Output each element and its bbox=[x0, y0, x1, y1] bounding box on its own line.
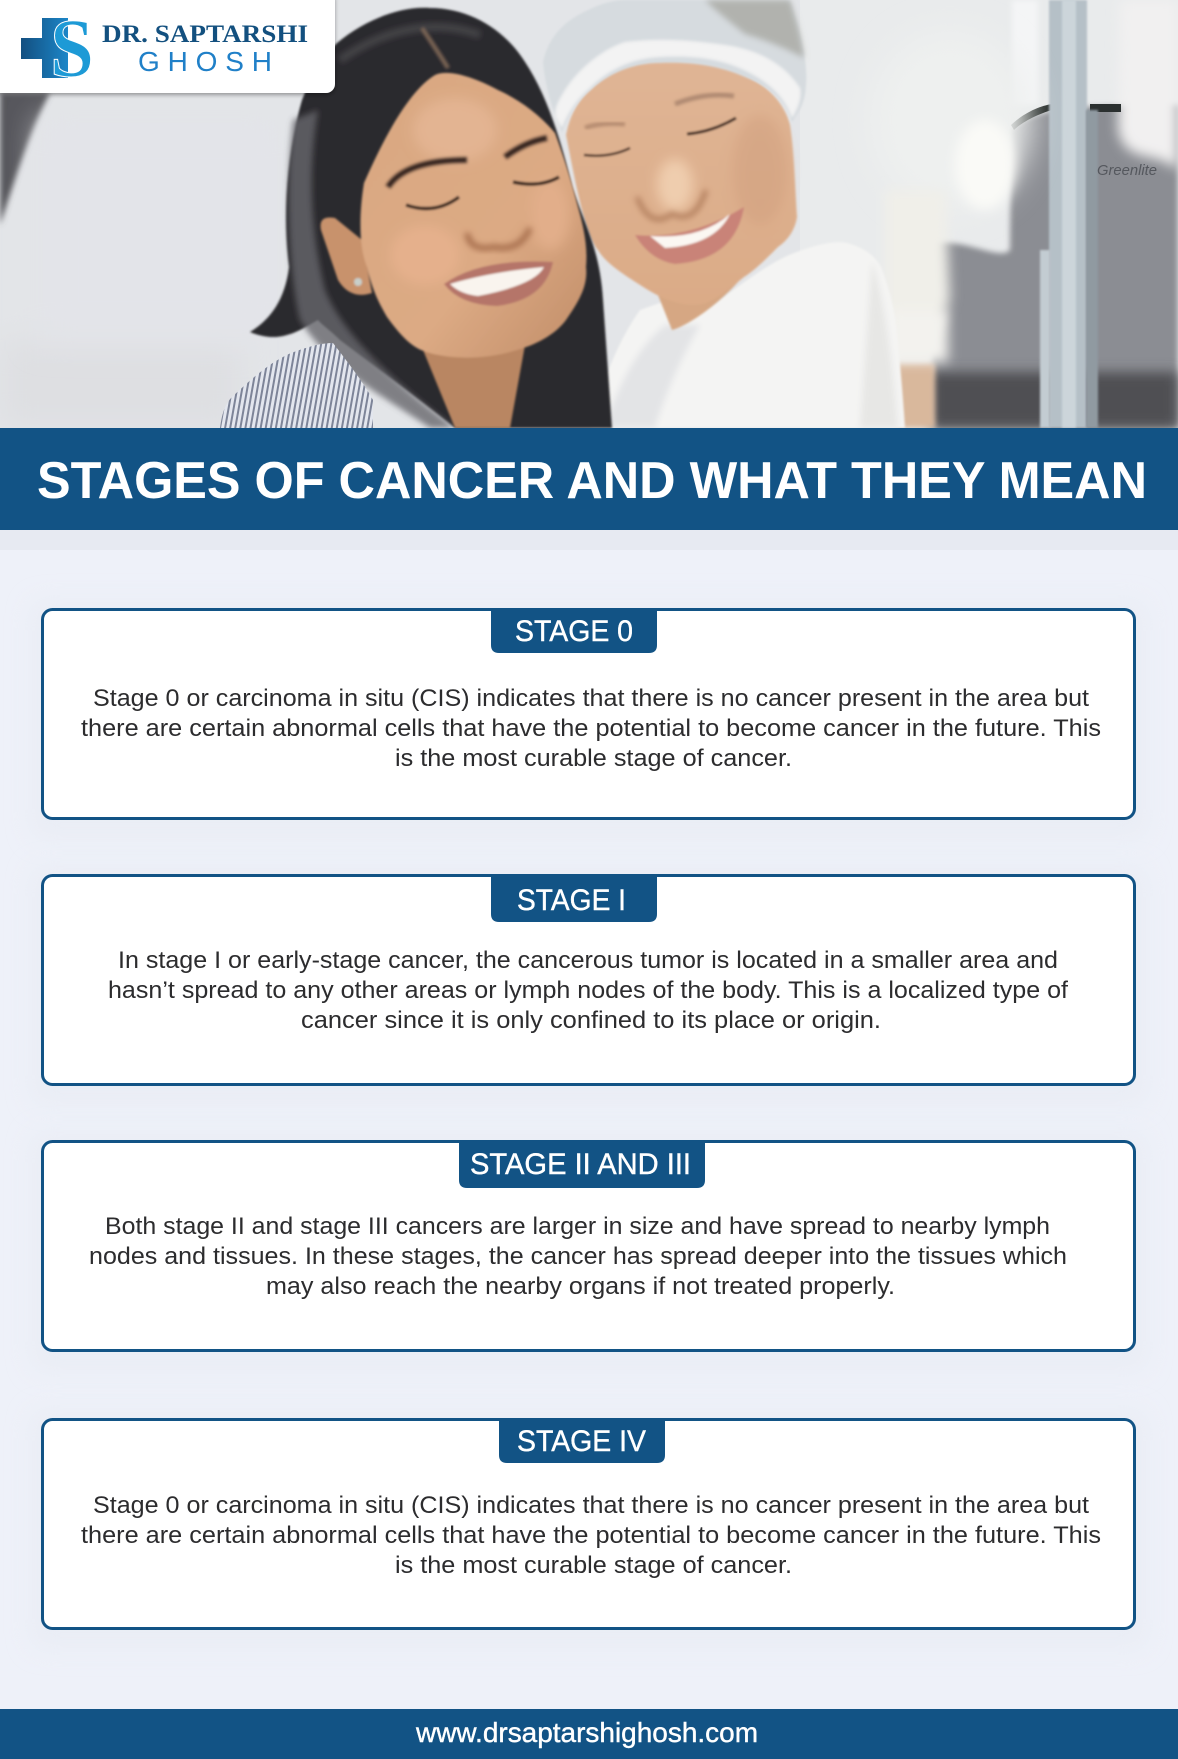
woman 2: headscarf bbox=[543, 0, 806, 132]
stage I badge bbox=[491, 874, 657, 922]
stage IV description bbox=[81, 1492, 1101, 1579]
stage I description: hasn’t spread to any other areas or lymph nodes of the body. This is a localized type of bbox=[108, 977, 1068, 1004]
footer bar bbox=[0, 1709, 1178, 1759]
stage I description: cancer since it is only confined to its place or origin. bbox=[301, 1007, 881, 1034]
stage IV description: is the most curable stage of cancer. bbox=[395, 1552, 792, 1579]
logo wordmark bbox=[102, 19, 308, 77]
stage IV badge: STAGE IV bbox=[517, 1425, 646, 1458]
stage 0 badge: STAGE 0 bbox=[515, 615, 633, 648]
logo wordmark: GHOSH bbox=[138, 46, 272, 77]
stage IV description: there are certain abnormal cells that have the potential to become cancer in the future. This bbox=[81, 1522, 1101, 1549]
logo panel bbox=[0, 0, 335, 95]
panel: stage I bbox=[30, 866, 1148, 1106]
woman 1: nose bbox=[467, 228, 530, 248]
woman 2: eyebrows, eyes, nose bbox=[584, 95, 736, 219]
woman 1: hair bbox=[250, 8, 612, 428]
woman 1: neck and face bbox=[321, 73, 586, 428]
stage I description: In stage I or early-stage cancer, the cancerous tumor is located in a smaller area and bbox=[118, 947, 1058, 974]
stage II and III description bbox=[89, 1213, 1067, 1300]
photo backdrop bbox=[0, 0, 1178, 428]
stage II and III badge bbox=[459, 1140, 705, 1188]
stage II and III description: may also reach the nearby organs if not treated properly. bbox=[266, 1273, 895, 1300]
title banner bbox=[0, 428, 1178, 530]
logo wordmark: DR. SAPTARSHI bbox=[102, 19, 308, 48]
stage II and III description: nodes and tissues. In these stages, the cancer has spread deeper into the tissues which bbox=[89, 1243, 1067, 1270]
earring bbox=[354, 278, 362, 286]
stage 0 description: is the most curable stage of cancer. bbox=[395, 745, 792, 772]
title: STAGES OF CANCER AND WHAT THEY MEAN bbox=[37, 452, 1147, 510]
woman 2: neck and face bbox=[566, 60, 797, 330]
stage II and III description: Both stage II and stage III cancers are larger in size and have spread to nearby lymph bbox=[105, 1213, 1050, 1240]
stage 0 description: Stage 0 or carcinoma in situ (CIS) indicates that there is no cancer present in the area but bbox=[93, 685, 1089, 712]
woman 1: eyebrows and closed eyes bbox=[388, 138, 559, 209]
logo mark: cross and S bbox=[21, 2, 94, 95]
stage I description bbox=[108, 947, 1068, 1034]
panel: stage II and III bbox=[30, 1132, 1148, 1372]
stage 0 description bbox=[81, 685, 1101, 772]
panel: stage 0 bbox=[30, 600, 1148, 840]
woman 1: striped shirt bbox=[220, 343, 373, 428]
blurred background equipment: Greenlite bbox=[1097, 162, 1157, 179]
banner under-shadow strip bbox=[0, 530, 1178, 550]
panel: stage IV bbox=[30, 1410, 1148, 1650]
woman 1: smile bbox=[444, 261, 553, 306]
blurred background equipment bbox=[870, 0, 1178, 428]
stage IV badge bbox=[499, 1418, 665, 1463]
logo mark: cross and S: S bbox=[50, 2, 94, 95]
woman 2: smile bbox=[635, 207, 744, 264]
stage IV description: Stage 0 or carcinoma in situ (CIS) indicates that there is no cancer present in the area but bbox=[93, 1492, 1089, 1519]
website url: www.drsaptarshighosh.com bbox=[415, 1717, 758, 1748]
stage II and III badge: STAGE II AND III bbox=[470, 1148, 691, 1181]
stage 0 badge bbox=[491, 608, 657, 653]
woman 2: white shirt bbox=[590, 242, 905, 428]
hero photo: two smiling women embracing bbox=[0, 0, 1178, 428]
stage I badge: STAGE I bbox=[517, 884, 626, 917]
stage 0 description: there are certain abnormal cells that have the potential to become cancer in the future. This bbox=[81, 715, 1101, 742]
